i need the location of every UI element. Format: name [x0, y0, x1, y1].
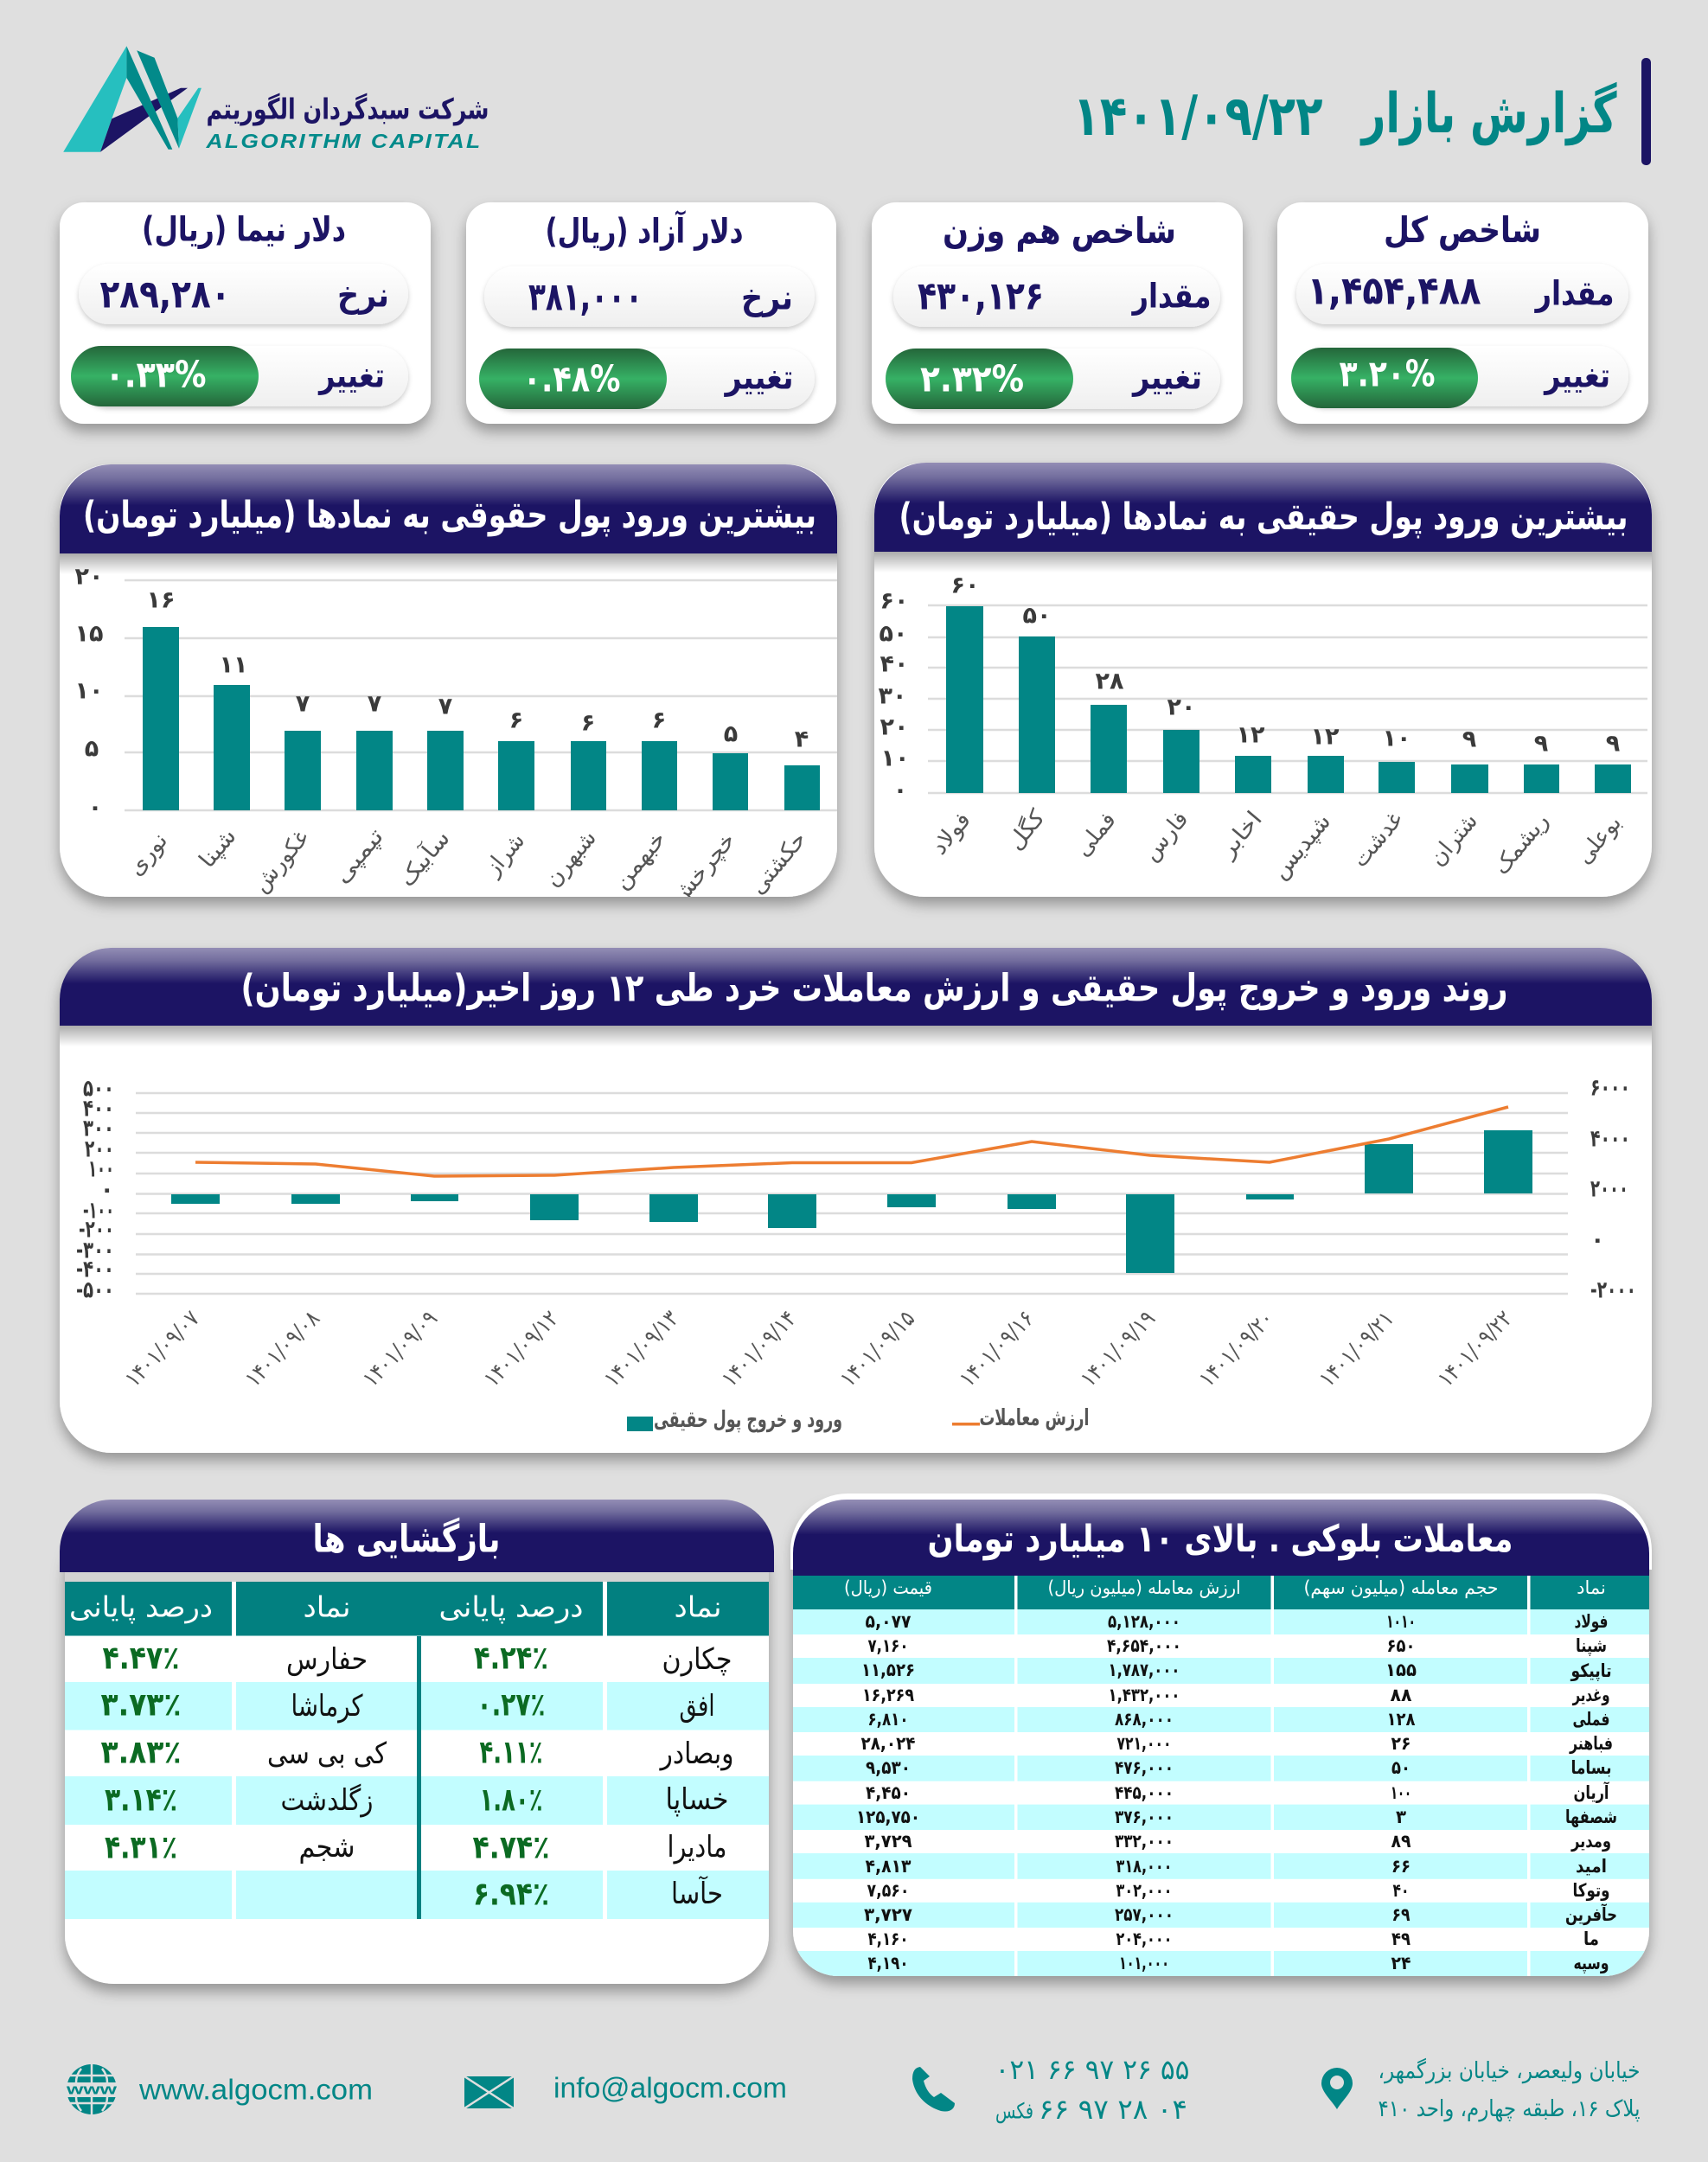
- phone and fax: فکس: [995, 2098, 1033, 2124]
- block trades table: ۴,۱۶۰: [868, 1929, 908, 1949]
- combo chart: ۱۴۰۱/۰۹/۱۳: [599, 1306, 684, 1392]
- bar chart: ۵۰: [880, 621, 907, 647]
- bar chart: تپمپی: [329, 823, 389, 889]
- bar chart: حکشتی: [745, 827, 812, 899]
- panel: top real money inflow: [874, 463, 1652, 897]
- panel: 12 day real money trend: [60, 948, 1652, 1453]
- panel: top legal money inflow: [60, 464, 837, 911]
- combo chart: ۱۴۰۱/۰۹/۰۸: [240, 1306, 325, 1392]
- block trades table: ۹,۵۳۰: [866, 1757, 911, 1778]
- block trades table: ۸۸: [1391, 1685, 1412, 1705]
- bar chart: ۱۱: [220, 652, 247, 678]
- bar chart: غدشت: [1347, 807, 1408, 873]
- block trades table: ۳: [1396, 1807, 1406, 1827]
- card: free dollar: دلار آزاد (ریال): [545, 209, 744, 251]
- block trades table: ۷,۵۶۰: [867, 1880, 910, 1901]
- card: equal weight index: ۴۳۰,۱۲۶: [918, 273, 1044, 318]
- reopenings table: زگلدشت: [280, 1783, 374, 1818]
- combo chart: ۱۴۰۱/۰۹/۲۱: [1315, 1306, 1399, 1392]
- combo chart: -۱۰۰: [83, 1197, 114, 1225]
- icon: globe: [66, 2064, 118, 2114]
- block trades table: ما: [1583, 1929, 1599, 1949]
- block trades table: حجم معامله (میلیون سهم): [1304, 1577, 1498, 1599]
- combo chart: ۱۴۰۱/۰۹/۱۶: [955, 1306, 1040, 1392]
- block trades table: ۷۲۱,۰۰۰: [1117, 1733, 1171, 1754]
- block trades table: ارزش معامله (میلیون ریال): [1048, 1577, 1240, 1598]
- reopenings table: ۴.۴۷٪: [102, 1640, 180, 1676]
- icon: location pin: [1321, 2068, 1353, 2109]
- block trades table: حآفرین: [1565, 1903, 1617, 1925]
- website: www.algocm.com: [138, 2074, 373, 2105]
- block trades table: ۸۹: [1391, 1831, 1411, 1852]
- card: Nima dollar: [60, 202, 431, 424]
- block trades table: ۱۱,۵۲۶: [861, 1660, 915, 1680]
- bar chart: ۵: [85, 735, 99, 763]
- bar chart: ۲۰: [75, 564, 103, 590]
- bar chart: ۹: [1534, 730, 1548, 758]
- icon: mail: [464, 2076, 514, 2108]
- reopenings table: ۴.۱۱٪: [479, 1733, 543, 1771]
- combo chart: ۴۰۰: [83, 1095, 114, 1123]
- reopenings table: شجم: [299, 1830, 355, 1865]
- block trades table: ۲۰۴,۰۰۰: [1116, 1929, 1173, 1949]
- legend: [627, 1405, 1090, 1433]
- card: Nima dollar: ۰.۳۳%: [106, 353, 206, 396]
- block trades table: ۱,۷۸۷,۰۰۰: [1109, 1660, 1180, 1680]
- block trades table: ۳۱۸,۰۰۰: [1116, 1856, 1173, 1877]
- block trades table: ۴,۶۵۴,۰۰۰: [1107, 1635, 1181, 1656]
- bar chart: ۱۰: [75, 678, 103, 704]
- bar chart: ۲۰: [1167, 694, 1195, 721]
- combo chart: ۱۴۰۱/۰۹/۲۲: [1433, 1306, 1518, 1392]
- logo: [63, 46, 489, 152]
- block trades table: فولاد: [1574, 1611, 1609, 1632]
- block trades table: ۱۲۵,۷۵۰: [856, 1807, 920, 1827]
- logo: شرکت سبدگردان الگوریتم: [206, 92, 489, 126]
- reopenings table: ۱.۸۰٪: [479, 1781, 543, 1818]
- reopenings table: [65, 1582, 769, 1919]
- card: total index: ۱,۴۵۴,۴۸۸: [1308, 268, 1481, 313]
- bar chart: ۴: [795, 726, 809, 752]
- reopenings table: ۳.۱۴٪: [105, 1781, 177, 1818]
- bar chart: سآبیک: [393, 824, 456, 892]
- bar chart: ۱۲: [1311, 723, 1340, 751]
- block trades table: ۴,۸۱۳: [865, 1856, 912, 1877]
- card: total index: مقدار: [1534, 275, 1614, 313]
- bar chart: کگل: [1001, 804, 1051, 855]
- legend: ارزش معاملات: [979, 1405, 1090, 1431]
- block trades table: بساما: [1570, 1757, 1612, 1778]
- bar chart: غکورش: [248, 825, 314, 898]
- block trades table: ۳,۷۲۹: [865, 1831, 912, 1852]
- bar chart: ۶۰: [880, 588, 908, 614]
- card: free dollar: ۳۸۱,۰۰۰: [528, 273, 643, 320]
- card: equal weight index: تغییر: [1131, 358, 1202, 398]
- combo chart: -۲۰۰: [79, 1216, 114, 1244]
- bar chart: ۲۰: [880, 714, 908, 740]
- bar chart: [879, 572, 1647, 885]
- bar chart: خچرخش: [665, 828, 741, 911]
- block trades table: ۴۰: [1392, 1880, 1410, 1901]
- icon: globe: www: [66, 2081, 118, 2098]
- report title: گزارش بازار: [1359, 81, 1617, 146]
- bar chart: فولاد: [926, 808, 976, 860]
- reopenings table: حآسا: [671, 1876, 723, 1911]
- header: بیشترین ورود پول حقوقی به نمادها (میلیارد تومان): [83, 494, 816, 537]
- bar chart: شپدیس: [1267, 809, 1336, 885]
- block trades table: ۳۳۲,۰۰۰: [1115, 1831, 1174, 1852]
- bar chart: ۵۰: [1023, 602, 1051, 630]
- card: total index: شاخص کل: [1384, 209, 1541, 251]
- bar chart: ۱۵: [75, 621, 103, 647]
- reopenings table: ۴.۷۴٪: [472, 1828, 550, 1866]
- bar chart: ۱۶: [147, 586, 175, 614]
- block trades table: فباهنر: [1569, 1733, 1613, 1754]
- combo chart: ۱۴۰۱/۰۹/۲۰: [1194, 1306, 1279, 1392]
- report title: [1072, 58, 1651, 165]
- header: معاملات بلوکی . بالای ۱۰ میلیارد تومان: [927, 1518, 1513, 1561]
- combo chart: ۶۰۰۰: [1590, 1074, 1630, 1102]
- card: total index: تغییر: [1543, 356, 1610, 396]
- header: روند ورود و خروج پول حقیقی و ارزش معاملات خرد طی ۱۲ روز اخیر(میلیارد تومان): [240, 967, 1508, 1010]
- bar chart: ۱۲: [1237, 721, 1265, 749]
- reopenings table: درصد پایانی: [69, 1590, 213, 1624]
- combo chart: ۱۰۰: [88, 1155, 114, 1183]
- block trades table: ۱۰۱,۰۰۰: [1119, 1953, 1169, 1973]
- card: Nima dollar: ۲۸۹,۲۸۰: [100, 272, 230, 317]
- block trades table: قیمت (ریال): [844, 1577, 932, 1598]
- phone and fax: ۶۶ ۹۷ ۲۸ ۰۴: [1039, 2093, 1187, 2126]
- bar chart: ۶: [509, 707, 523, 733]
- bar chart: ۳۰: [879, 683, 906, 709]
- reopenings table: کی بی سی: [267, 1737, 387, 1771]
- reopenings table: خساپا: [666, 1782, 728, 1817]
- bar chart: ۷: [438, 694, 453, 720]
- bar chart: شبهرن: [540, 825, 602, 892]
- card: free dollar: نرخ: [741, 278, 793, 318]
- block trades table: ۱,۴۳۲,۰۰۰: [1109, 1685, 1180, 1705]
- header: [793, 1500, 1649, 1576]
- block trades table: ومدیر: [1570, 1831, 1611, 1852]
- bar chart: [75, 564, 837, 911]
- block trades table: [793, 1576, 1649, 1976]
- phone and fax: [995, 2053, 1190, 2126]
- block trades table: ۷,۱۶۰: [868, 1635, 908, 1656]
- block trades table: امید: [1576, 1856, 1607, 1877]
- card: equal weight index: مقدار: [1131, 277, 1211, 317]
- reopenings table: نماد: [303, 1590, 351, 1624]
- combo chart: -۴۰۰: [76, 1256, 114, 1283]
- bar chart: فملی: [1070, 808, 1122, 861]
- card: equal weight index: ۲.۳۲%: [920, 358, 1024, 400]
- reopenings table: حفارس: [286, 1642, 368, 1677]
- email: info@algocm.com: [553, 2072, 787, 2103]
- reopenings table: نماد: [675, 1590, 721, 1624]
- bar chart: ۱۰: [881, 745, 909, 771]
- card: Nima dollar: تغییر: [317, 356, 385, 396]
- combo chart: ۴۰۰۰: [1590, 1126, 1630, 1152]
- block trades table: ۳,۷۲۷: [864, 1904, 912, 1925]
- reopenings table: کرماشا: [291, 1689, 363, 1724]
- combo chart: [76, 1074, 1636, 1392]
- bar chart: ۴۰: [880, 650, 908, 678]
- combo chart: ۱۴۰۱/۰۹/۱۵: [835, 1306, 920, 1392]
- reopenings table: افق: [680, 1689, 714, 1724]
- legend: ورود و خروج پول حقیقی: [654, 1407, 842, 1433]
- combo chart: -۵۰۰: [76, 1276, 114, 1304]
- block trades table: شپنا: [1576, 1635, 1607, 1656]
- bar chart: بوعلی: [1571, 810, 1627, 869]
- bar chart: ۹: [1462, 726, 1476, 752]
- block trades table: ۶۶: [1391, 1856, 1411, 1877]
- bar chart: ۶: [652, 707, 666, 733]
- report title: ۱۴۰۱/۰۹/۲۲: [1072, 85, 1323, 149]
- block trades table: ۴۹: [1391, 1929, 1411, 1949]
- combo chart: ۰: [100, 1176, 114, 1204]
- combo chart: ۱۴۰۱/۰۹/۱۲: [479, 1306, 564, 1392]
- bar chart: ۲۸: [1096, 668, 1124, 695]
- address: پلاک ۱۶، طبقه چهارم، واحد ۴۱۰: [1379, 2096, 1640, 2122]
- card: equal weight index: شاخص هم وزن: [943, 210, 1176, 253]
- reopenings table: ۳.۷۳٪: [100, 1686, 182, 1723]
- bar chart: شراز: [479, 828, 530, 882]
- bar chart: ۱۰: [1383, 725, 1411, 752]
- combo chart: ۲۰۰۰: [1590, 1176, 1628, 1202]
- bar chart: ۵: [724, 721, 738, 747]
- block trades table: وغدیر: [1572, 1685, 1610, 1705]
- bar chart: نوری: [123, 828, 173, 881]
- block trades table: ۶۵۰: [1387, 1635, 1415, 1656]
- block trades table: ۴,۱۹۰: [868, 1953, 908, 1973]
- reopenings table: درصد پایانی: [439, 1590, 583, 1624]
- bar chart: شپنا: [194, 823, 242, 873]
- address: [1379, 2057, 1640, 2122]
- block trades table: شصفها: [1565, 1807, 1617, 1827]
- block trades table: ۴,۴۵۰: [866, 1782, 911, 1803]
- block trades table: ۵,۰۷۷: [865, 1611, 912, 1632]
- block trades table: فملی: [1572, 1709, 1610, 1730]
- header: [60, 464, 837, 574]
- block trades table: ۵۰: [1391, 1757, 1411, 1778]
- block trades table: ۱۰۱۰: [1386, 1611, 1416, 1632]
- card: total index: ۳.۲۰%: [1339, 353, 1436, 394]
- logo: ALGORITHM CAPITAL: [205, 130, 483, 152]
- combo chart: -۲۰۰۰: [1590, 1276, 1636, 1304]
- card: free dollar: [466, 202, 836, 424]
- bar chart: فارس: [1138, 806, 1193, 867]
- reopenings table: مادیرا: [668, 1830, 726, 1865]
- bar chart: خبهمن: [608, 826, 672, 895]
- block trades table: وسپه: [1574, 1953, 1609, 1973]
- header: بازگشایی ها: [313, 1517, 500, 1562]
- panel: reopenings: [60, 1500, 774, 1984]
- reopenings table: ۰.۲۷٪: [477, 1686, 545, 1723]
- block trades table: ۴۴۵,۰۰۰: [1115, 1782, 1174, 1803]
- combo chart: ۲۰۰: [85, 1136, 114, 1162]
- header: [874, 463, 1652, 572]
- block trades table: ۶۹: [1392, 1904, 1411, 1925]
- card: Nima dollar: نرخ: [337, 277, 389, 315]
- card: Nima dollar: دلار نیما (ریال): [142, 211, 346, 249]
- bar chart: ۶۰: [951, 572, 979, 598]
- bar chart: ۶: [581, 709, 595, 737]
- header: [60, 1500, 774, 1582]
- reopenings table: ۳.۸۳٪: [100, 1733, 182, 1771]
- block trades table: ۱۰۰: [1391, 1782, 1411, 1803]
- bar chart: ۷: [296, 690, 310, 718]
- reopenings table: چکارن: [662, 1642, 732, 1677]
- combo chart: ۳۰۰: [83, 1116, 114, 1142]
- block trades table: ۱۶,۲۶۹: [862, 1685, 914, 1705]
- combo chart: ۱۴۰۱/۰۹/۱۴: [717, 1306, 802, 1392]
- card: free dollar: ۰.۴۸%: [522, 358, 621, 400]
- bar chart: ۰: [88, 794, 102, 822]
- block trades table: ۶,۸۱۰: [868, 1709, 908, 1730]
- phone and fax: ۰۲۱ ۶۶ ۹۷ ۲۶ ۵۵: [995, 2053, 1190, 2086]
- icon: phone: [912, 2067, 955, 2112]
- bar chart: ۷: [368, 690, 382, 718]
- combo chart: ۱۴۰۱/۰۹/۰۹: [358, 1306, 443, 1392]
- reopenings table: ۴.۳۱٪: [105, 1828, 177, 1866]
- card: equal weight index: [872, 202, 1243, 424]
- bar chart: شتران: [1424, 809, 1483, 871]
- panel: block trades: [790, 1494, 1652, 1976]
- address: خیابان ولیعصر، خیابان بزرگمهر،: [1379, 2057, 1640, 2084]
- block trades table: ۲۸,۰۲۴: [861, 1733, 916, 1754]
- combo chart: ۱۴۰۱/۰۹/۰۷: [120, 1306, 205, 1392]
- block trades table: آریان: [1574, 1781, 1609, 1803]
- block trades table: ۲۴: [1391, 1953, 1411, 1973]
- reopenings table: ۴.۲۴٪: [474, 1640, 548, 1676]
- block trades table: ۴۷۶,۰۰۰: [1115, 1757, 1174, 1778]
- block trades table: ۵,۱۲۸,۰۰۰: [1108, 1611, 1180, 1632]
- bar chart: اخابر: [1213, 806, 1268, 864]
- block trades table: ۱۵۵: [1385, 1660, 1417, 1680]
- block trades table: ۲۶: [1391, 1733, 1411, 1754]
- combo chart: -۳۰۰: [76, 1237, 114, 1264]
- block trades table: وتوکا: [1572, 1880, 1610, 1901]
- block trades table: ۲۵۷,۰۰۰: [1115, 1904, 1174, 1925]
- block trades table: ۳۰۲,۰۰۰: [1116, 1880, 1173, 1901]
- block trades table: نماد: [1577, 1577, 1606, 1598]
- reopenings table: ۶.۹۴٪: [473, 1875, 549, 1913]
- bar chart: ریشمک: [1488, 809, 1554, 880]
- combo chart: ۰: [1590, 1226, 1604, 1254]
- bar chart: ۰: [893, 777, 907, 804]
- card: free dollar: تغییر: [724, 358, 794, 398]
- block trades table: ۸۶۸,۰۰۰: [1115, 1709, 1174, 1730]
- bar chart: ۹: [1606, 730, 1620, 758]
- block trades table: ۱۲۸: [1387, 1709, 1416, 1730]
- block trades table: ۳۷۶,۰۰۰: [1115, 1807, 1174, 1827]
- block trades table: تاپیکو: [1570, 1660, 1612, 1681]
- card: total index: [1277, 202, 1648, 424]
- header: [60, 948, 1652, 1046]
- combo chart: ۱۴۰۱/۰۹/۱۹: [1076, 1306, 1161, 1392]
- reopenings table: وبصادر: [659, 1737, 733, 1771]
- combo chart: ۵۰۰: [83, 1076, 114, 1102]
